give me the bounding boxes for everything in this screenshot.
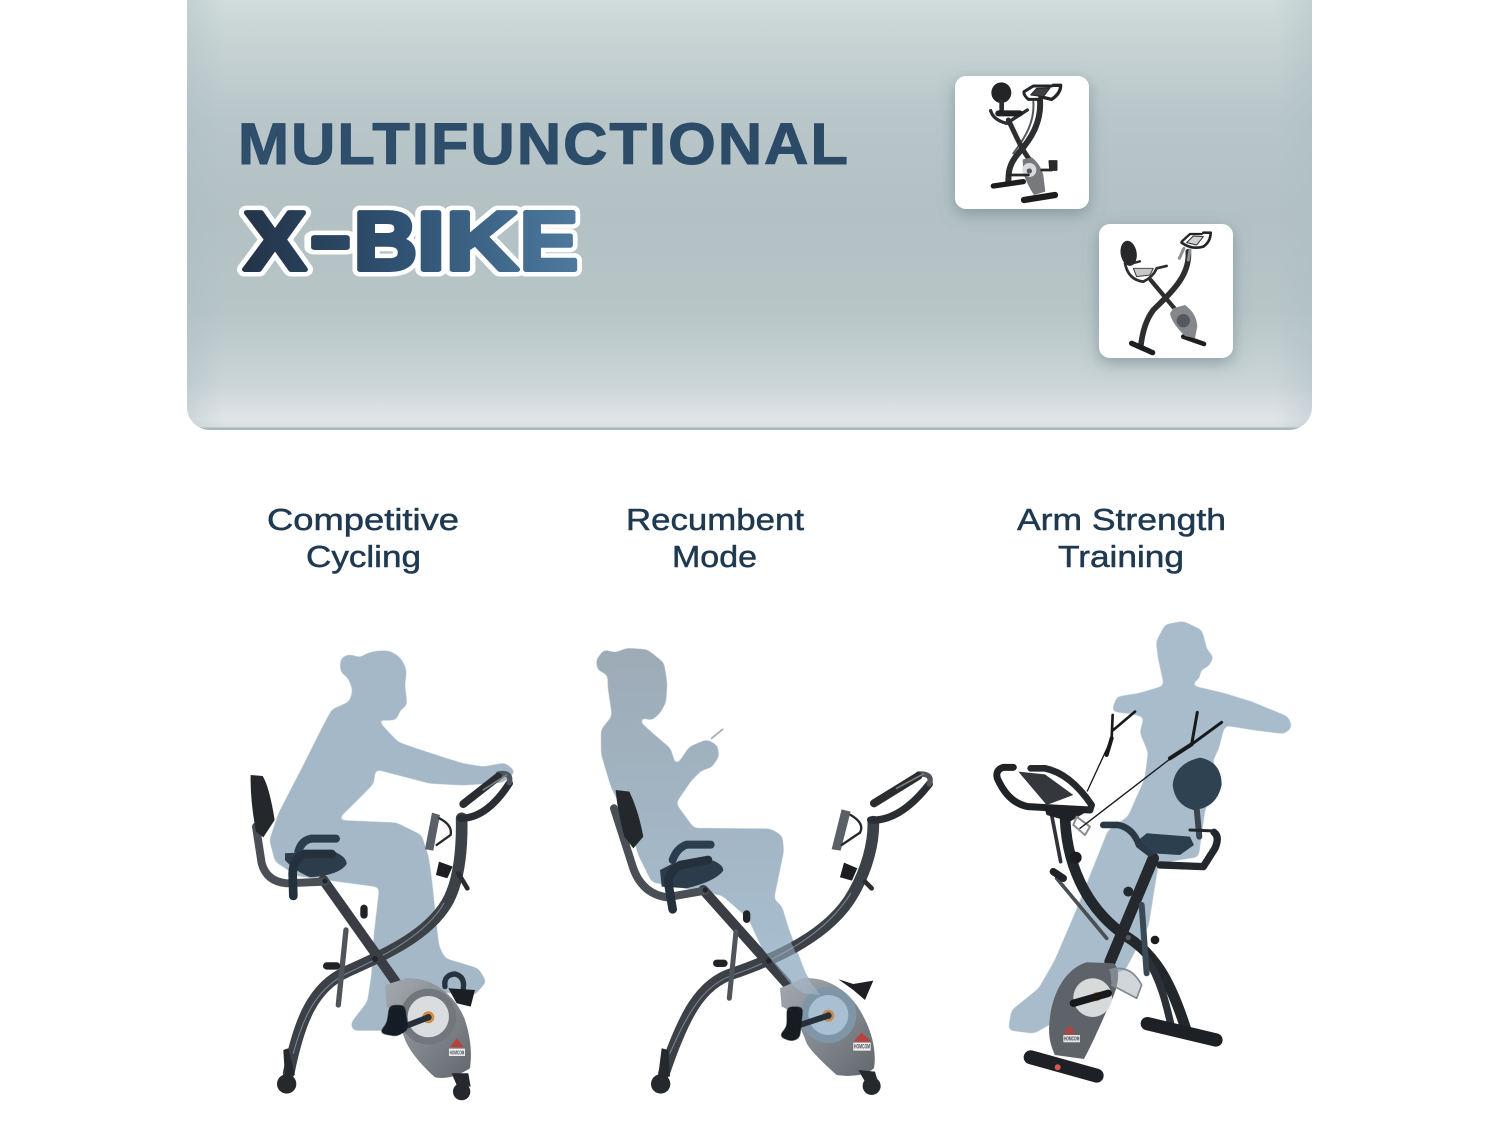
wheels	[651, 1048, 881, 1095]
label: Arm Strength Training: Arm Strength	[1017, 503, 1226, 537]
figure: competitive cycling	[251, 650, 516, 1100]
label: Recumbent Mode: Mode	[672, 540, 757, 574]
panel: header banner	[187, 0, 1312, 430]
thumbnail card: upright bike	[955, 76, 1089, 209]
seat and arm rests	[1103, 825, 1217, 867]
flywheel housing	[778, 978, 875, 1076]
seat and arm rests	[660, 845, 723, 909]
label: Arm Strength Training	[1017, 503, 1226, 574]
label: Competitive Cycling: Competitive	[267, 503, 459, 537]
brand logo: HOMCOM	[450, 1050, 464, 1056]
label: Competitive Cycling	[267, 503, 459, 574]
label: Competitive Cycling: Cycling	[306, 540, 421, 574]
frame	[614, 808, 873, 1073]
title: X-BIKE: B	[354, 194, 417, 288]
brand logo: HOMCOM	[1064, 1037, 1079, 1043]
handlebar and console	[425, 774, 510, 878]
handlebar and console	[832, 774, 930, 881]
title: X-BIKE: -	[310, 189, 351, 282]
label: Recumbent Mode	[626, 503, 805, 574]
leg overlay on frame	[763, 940, 820, 995]
flywheel housing	[378, 974, 475, 1078]
phone	[712, 729, 723, 738]
seat and arm rests	[285, 839, 347, 896]
title: MULTIFUNCTIONAL: MULTIFUNCTIONAL	[238, 112, 850, 177]
base feet	[1031, 1024, 1216, 1076]
figure: arm strength training	[997, 621, 1292, 1076]
frame	[1052, 808, 1199, 1032]
rider silhouette	[596, 648, 820, 995]
title: X-BIKE: X	[244, 194, 306, 288]
brand logo: HOMCOM	[854, 1045, 870, 1051]
flywheel housing	[1049, 962, 1142, 1059]
title: X-BIKE: -	[310, 189, 351, 282]
wheels	[277, 1048, 471, 1100]
label: Recumbent Mode: Recumbent	[626, 503, 805, 537]
title: X-BIKE: X	[244, 194, 306, 288]
backrest	[1173, 758, 1222, 810]
resistance bands	[1080, 712, 1222, 828]
frame	[256, 818, 467, 1073]
title: X-BIKE: E	[520, 194, 578, 288]
handlebar and console	[997, 767, 1092, 835]
label: Arm Strength Training: Training	[1058, 540, 1184, 574]
title: X-BIKE: I	[417, 194, 445, 288]
title: X-BIKE: E	[520, 194, 578, 288]
title: X-BIKE: K	[446, 194, 518, 288]
figure: recumbent mode	[596, 648, 930, 1095]
title: X-BIKE: I	[417, 194, 445, 288]
rider silhouette	[1008, 621, 1292, 1034]
title: X-BIKE	[244, 189, 578, 288]
backrest	[616, 790, 643, 848]
title: X-BIKE: B	[354, 194, 417, 288]
infographic canvas	[187, 0, 1312, 1100]
title: X-BIKE: K	[446, 194, 518, 288]
thumbnail card: folded recline bike	[1099, 224, 1233, 358]
rider silhouette	[269, 650, 516, 1031]
backrest	[251, 775, 275, 837]
